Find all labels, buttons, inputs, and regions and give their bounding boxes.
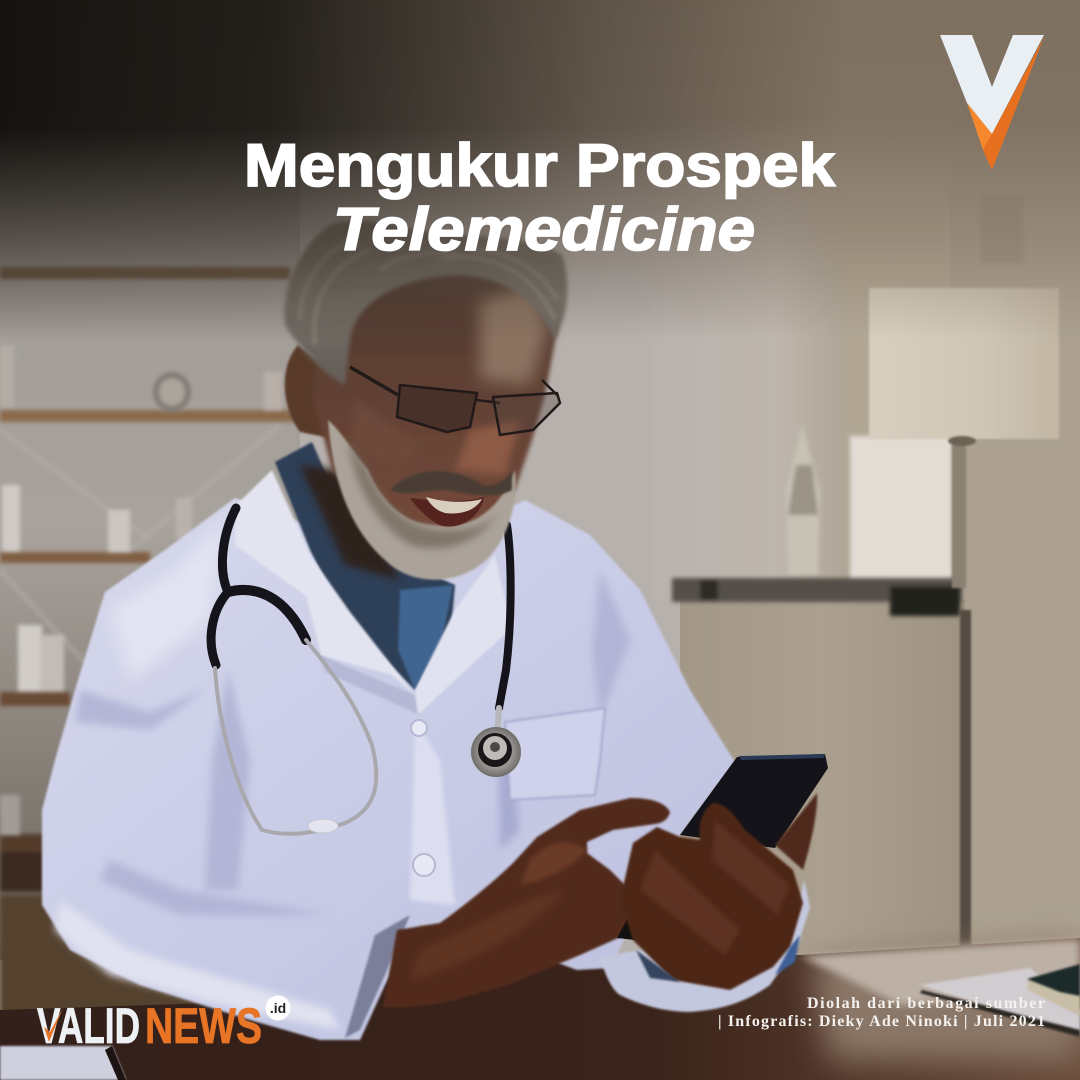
blue cuff edge [775,935,800,975]
forehead highlight [480,285,548,385]
hair strands [300,240,558,345]
front placket [410,720,455,905]
blue shirt [275,442,455,690]
phone lower edge [617,905,655,940]
ear [285,345,330,438]
logo: Validnews [37,996,290,1054]
papers on desk [920,968,1080,1036]
left collar [235,470,415,695]
lab coat body [42,498,735,1040]
counter band [672,578,962,616]
desk [0,938,1080,1080]
book [1028,965,1080,1016]
wall panel lower [680,600,965,960]
shirt cuff right [600,880,810,1012]
glasses [350,367,560,435]
floor lamp pole [948,436,976,948]
beard inner shadow [348,440,500,549]
coat buttons [411,720,435,876]
beard [328,420,516,580]
hair [284,221,567,385]
phone [680,754,828,848]
desk highlight [810,940,1080,1060]
phone top edge highlight [739,754,825,760]
teeth [426,497,482,513]
coat sleeve left shading [75,570,630,915]
left hand back highlight [410,890,565,980]
doctor [42,221,828,1040]
cheek shadow [350,400,420,470]
mouth [410,497,484,526]
right collar [415,555,515,715]
sleeve highlight [110,520,225,680]
right hand [620,803,803,990]
logo: V emblem [940,35,1044,170]
wordmark orange: NEWS [145,998,262,1054]
vase [786,425,820,575]
stethoscope [211,508,511,834]
credit text [718,995,1045,1030]
stethoscope chest piece [471,727,521,777]
top dark gradient overlay [0,0,1080,331]
title line 2: Telemedicine [333,196,755,263]
floor lamp shade [869,288,1059,439]
.id badge [266,996,290,1020]
shirt mesh under cuff [636,950,680,982]
pocket [505,708,605,800]
wall switch [980,195,1024,263]
title line 1: Mengukur Prospek [244,132,836,199]
arm cuff [345,915,410,1038]
left hand [383,798,670,1008]
wordmark white: VALID [37,998,140,1054]
left finger highlight [520,842,587,885]
notebook bottom left [0,1046,126,1080]
left shelves [0,267,300,1020]
orange accent in V [44,1008,63,1042]
right hand finger highlights [712,820,790,915]
moustache [390,470,512,495]
shelf objects [0,345,282,835]
face [314,240,557,530]
.id badge: .id [270,1000,286,1016]
title [244,132,836,263]
credit line: | Infografis: Dieky Ade Ninoki | Juli 2021 [718,1013,1045,1030]
nose [455,420,520,475]
neck [300,465,400,580]
bright window [850,436,952,586]
source line: Diolah dari berbagai sumber [807,995,1045,1012]
fingers behind phone [775,793,817,870]
